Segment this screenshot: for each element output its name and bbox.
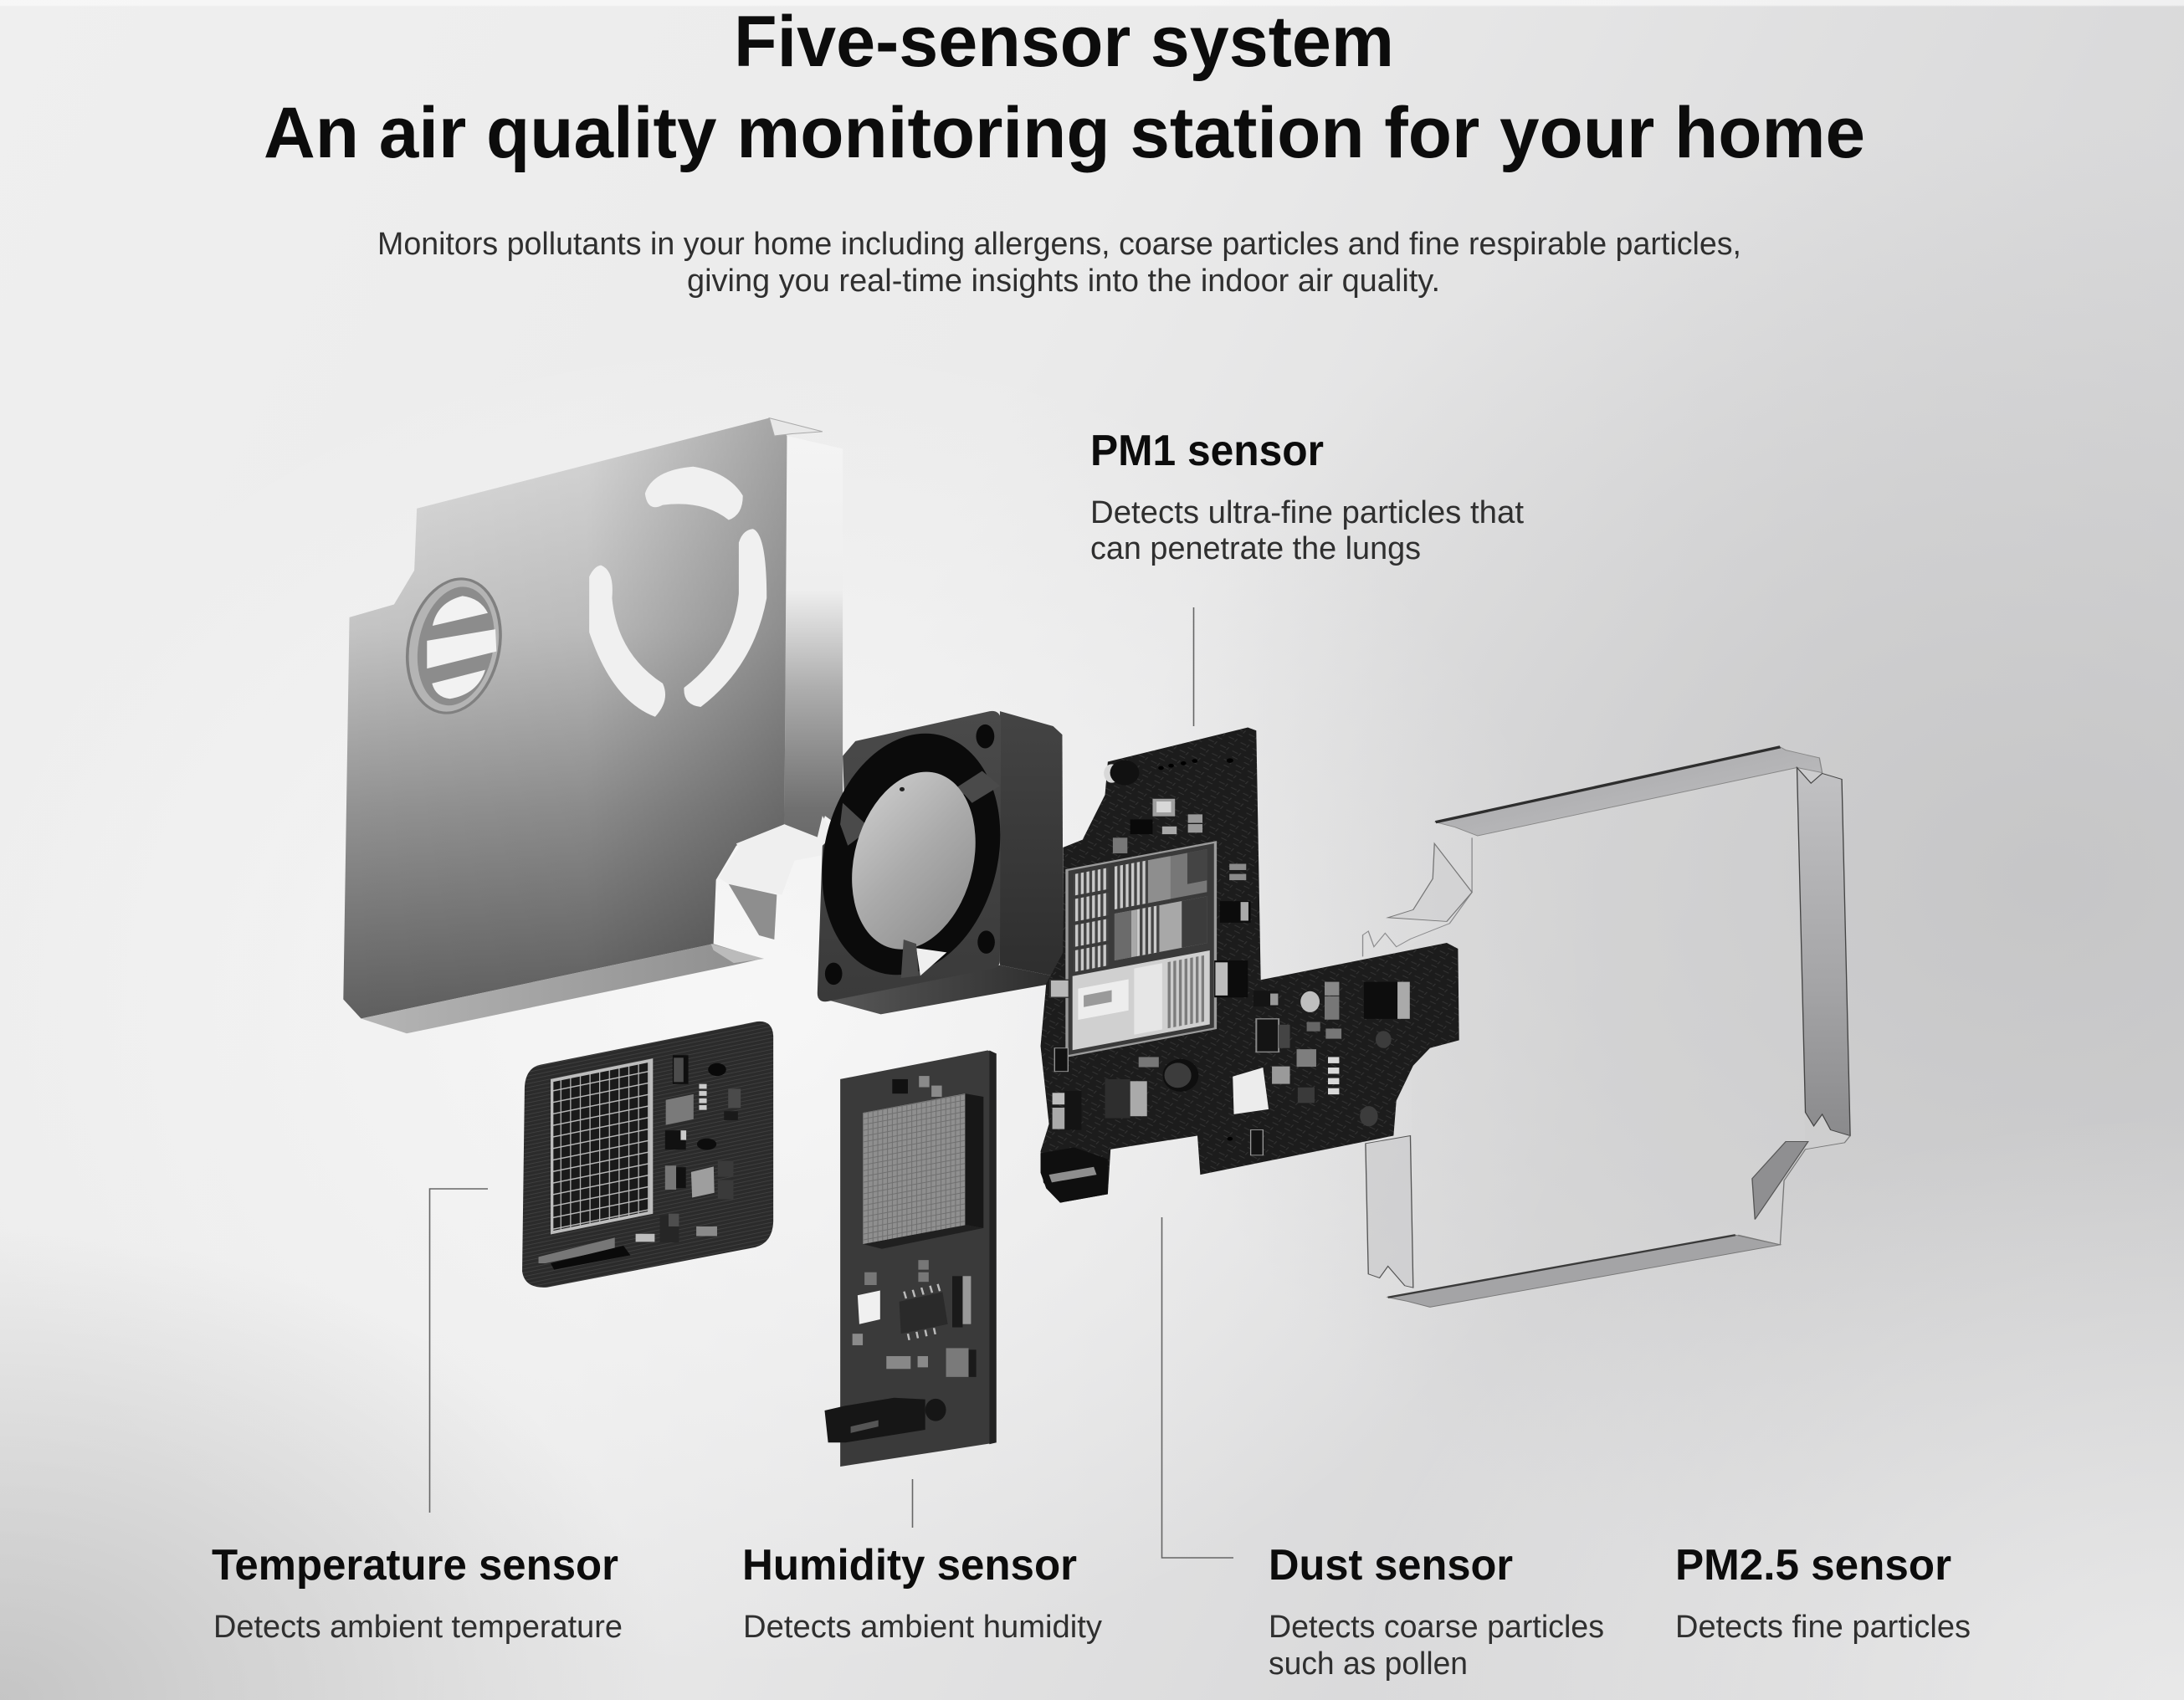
metal cover panel (343, 418, 843, 1033)
cover vent openings (589, 467, 766, 717)
cover white tab (711, 816, 833, 963)
title (264, 2, 1865, 173)
cover bottom lip (361, 944, 761, 1033)
fan (802, 711, 1064, 1014)
label: PM2.5 sensor: Detects fine particles (1675, 1610, 1971, 1645)
subtitle (377, 227, 1741, 299)
leader line: humidity sensor (912, 1479, 914, 1528)
subtitle: giving you real-time insights into the indoor air quality. (687, 264, 1440, 299)
humidity sensor grid (863, 1093, 983, 1249)
subtitle: Monitors pollutants in your home including allergens, coarse particles and fine respirable particles, (377, 227, 1741, 262)
fan bottom face (818, 965, 1064, 1014)
label: humidity sensor: Humidity sensor (742, 1541, 1077, 1590)
temperature board components (539, 1055, 741, 1270)
label: dust sensor (1269, 1541, 1604, 1682)
fan side face (1000, 711, 1064, 978)
label: humidity sensor: Detects ambient humidity (743, 1610, 1102, 1645)
leader line: PM1 sensor (1193, 607, 1195, 726)
title: An air quality monitoring station for your home (264, 93, 1865, 173)
cover round grille (397, 574, 510, 718)
fan screw holes (825, 725, 995, 985)
PCB board (1041, 728, 1459, 1203)
metal frame: right exploded part (1363, 747, 1850, 1307)
label: dust sensor: such as pollen (1269, 1646, 1468, 1682)
leader line: temperature sensor (430, 1189, 488, 1513)
title: Five-sensor system (734, 2, 1394, 82)
temperature sensor grid (551, 1058, 653, 1235)
leader line: dust sensor (1161, 1217, 1233, 1558)
label: PM1 sensor: Detects ultra-fine particles that (1090, 495, 1524, 530)
cover front face (343, 418, 787, 1018)
fan blade ring (802, 723, 1020, 986)
fan hub (836, 764, 991, 958)
humidity sensor board (824, 1050, 997, 1467)
grille slots (427, 596, 496, 699)
label: PM1 sensor (1090, 427, 1524, 566)
PCB sensor chip (1067, 842, 1215, 1057)
cover side face (784, 436, 843, 842)
label: humidity sensor (742, 1541, 1102, 1645)
label: dust sensor: Dust sensor (1269, 1541, 1513, 1590)
label: PM1 sensor: can penetrate the lungs (1090, 531, 1421, 566)
fan front face (818, 711, 1001, 1001)
label: temperature sensor: Detects ambient temperature (213, 1610, 623, 1645)
label: dust sensor: Detects coarse particles (1269, 1610, 1604, 1645)
label: PM2.5 sensor (1675, 1541, 1971, 1645)
humidity board components (824, 1076, 977, 1442)
label: PM1 sensor: PM1 sensor (1090, 427, 1324, 475)
PCB components (1041, 758, 1410, 1203)
temperature sensor board (522, 1022, 773, 1288)
main PCB (1041, 728, 1459, 1203)
label: PM2.5 sensor: PM2.5 sensor (1675, 1541, 1951, 1590)
label: temperature sensor (212, 1541, 623, 1645)
label: temperature sensor: Temperature sensor (212, 1541, 618, 1590)
